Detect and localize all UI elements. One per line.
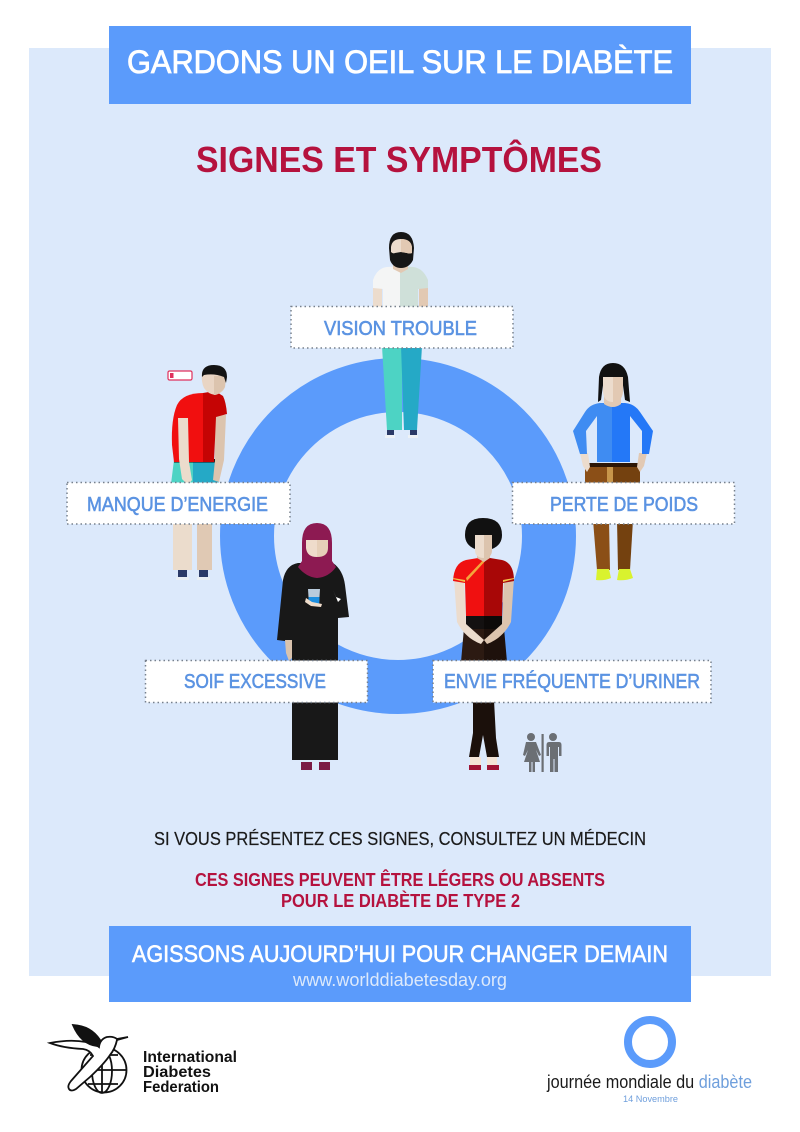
- warning text: [195, 869, 605, 911]
- organisation name: Federation: [143, 1079, 219, 1096]
- icon: low battery: [168, 371, 192, 380]
- label: vision trouble: [291, 306, 513, 348]
- warning text: POUR LE DIABÈTE DE TYPE 2: [281, 890, 520, 911]
- label: perte de poids: [512, 482, 734, 524]
- label: manque d'energie: [67, 482, 290, 524]
- bottom banner: [109, 926, 691, 1002]
- warning text: CES SIGNES PEUVENT ÊTRE LÉGERS OU ABSENTS: [195, 869, 605, 890]
- figure: man losing weight: [573, 363, 653, 580]
- label: envie fréquente d'uriner: ENVIE FRÉQUENTE D’URINER: [444, 670, 700, 693]
- background panel: [29, 48, 771, 976]
- figure: man with blurred vision: [373, 232, 428, 438]
- slogan: AGISSONS AUJOURD’HUI POUR CHANGER DEMAIN: [132, 941, 668, 968]
- logo: World Diabetes Day: [546, 1020, 752, 1104]
- organisation name: [143, 1049, 237, 1096]
- icon: blue circle: [628, 1020, 672, 1064]
- icon: hummingbird and globe: [50, 1025, 128, 1093]
- figure: woman with hijab holding a glass of water: [277, 523, 349, 770]
- date: 14 Novembre: [623, 1094, 678, 1104]
- icon: glass of water: [305, 589, 322, 607]
- figure: woman needing to urinate: [453, 518, 514, 770]
- label: envie fréquente d'uriner: [433, 660, 711, 702]
- website: www.worlddiabetesday.org: [292, 970, 507, 990]
- label: perte de poids: PERTE DE POIDS: [550, 494, 698, 516]
- subtitle: SIGNES ET SYMPTÔMES: [196, 138, 602, 180]
- title banner: [109, 26, 691, 104]
- logo: International Diabetes Federation: [50, 1025, 237, 1096]
- figure: tired man with low battery: [168, 365, 227, 580]
- label: manque d'energie: MANQUE D’ENERGIE: [87, 494, 268, 516]
- label: soif excessive: SOIF EXCESSIVE: [184, 671, 326, 693]
- icon: restroom: [523, 733, 562, 772]
- advice text: SI VOUS PRÉSENTEZ CES SIGNES, CONSULTEZ UN MÉDECIN: [154, 829, 646, 849]
- central blue ring: [247, 385, 549, 687]
- title: GARDONS UN OEIL SUR LE DIABÈTE: [127, 44, 673, 80]
- organisation name: International: [143, 1049, 237, 1066]
- label: soif excessive: [146, 660, 368, 702]
- label: vision trouble: VISION TROUBLE: [324, 318, 477, 340]
- event name: journée mondiale du diabète: [546, 1072, 752, 1092]
- organisation name: Diabetes: [143, 1064, 211, 1081]
